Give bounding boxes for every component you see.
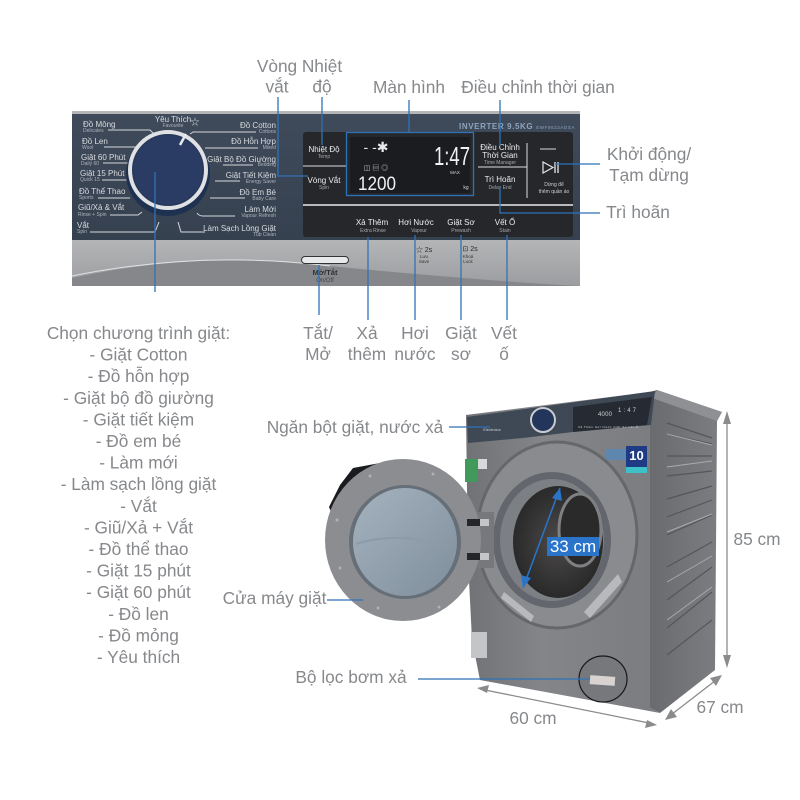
delay end button: Delay End [488, 185, 512, 191]
display and button area [303, 132, 573, 237]
program labels top: ☆ [190, 117, 200, 127]
mini display [573, 397, 652, 432]
program labels right: Tub Clean [253, 232, 276, 238]
drum [513, 486, 603, 598]
program list: - Đồ thể thao [89, 539, 188, 559]
program labels right: Đồ Hỗn Hợp [231, 137, 277, 146]
hold hints [416, 245, 478, 264]
callout: door line [327, 599, 363, 601]
delay end button [485, 175, 515, 191]
label: delay: Trì hoãn [606, 202, 670, 222]
warranty badge: 10 [629, 448, 644, 463]
on off button: On/Off [316, 278, 334, 284]
program labels left: Sports [79, 195, 94, 201]
program labels left: Giũ/Xả & Vắt [78, 203, 125, 212]
lower buttons: Stain [499, 228, 511, 234]
spin button [308, 176, 341, 191]
label: extra rinse: Xả [356, 323, 378, 343]
callout lines top panel [155, 97, 600, 320]
lower buttons: Vapour [411, 228, 427, 234]
side vents [667, 423, 712, 655]
front ring [477, 442, 637, 628]
energy sticker [465, 459, 477, 482]
LCD readout: 1200 [358, 173, 396, 195]
temp button: Temp [318, 154, 330, 160]
filter cover [579, 656, 627, 702]
spin button: Vòng Vắt [308, 176, 341, 185]
warranty badge [606, 446, 647, 473]
program labels right: Energy Saver [246, 179, 276, 185]
LCD readout: 1:47 [434, 141, 470, 171]
lower left label [471, 632, 487, 658]
arrow: drum diameter [521, 488, 562, 588]
callout: filter line [418, 678, 590, 680]
arrow: width [477, 685, 657, 728]
program labels left: Delicates [83, 128, 104, 134]
program labels left: Rinse + Spin [78, 212, 107, 218]
program labels left: Vắt [77, 221, 90, 230]
program list: - Giặt bộ đồ giường [63, 388, 214, 408]
program labels left: Đồ Len [82, 137, 108, 146]
label: vapour: Hơi [401, 323, 429, 343]
program list: - Giặt 15 phút [86, 561, 191, 581]
program labels right: Làm Mới [245, 205, 276, 214]
program labels right: Cottons [259, 129, 276, 135]
program list: - Làm sạch lồng giặt [61, 474, 217, 494]
program labels left: Quick 15 [80, 177, 100, 183]
label: width: 60 cm [509, 708, 557, 728]
hold hints: Lưu [420, 254, 428, 259]
program labels top: Favourite [163, 123, 184, 129]
model badge: INVERTER 9.5KG EWF9523ADSA [459, 122, 575, 131]
label: door: Cửa máy giặt [223, 588, 327, 608]
label: stain: Vết [491, 323, 517, 343]
hold hints: Save [419, 259, 430, 264]
LCD readout [350, 137, 470, 195]
program labels left: Daily 60 [81, 161, 99, 167]
program labels left: Giặt 60 Phút [81, 153, 126, 162]
program list: - Đồ hỗn hợp [88, 366, 189, 386]
label: extra rinse: thêm [348, 344, 386, 364]
hold hints: Lock [463, 259, 473, 264]
program labels left: Đồ Thể Thao [79, 187, 126, 196]
open door [325, 459, 494, 621]
program list: - Đồ len [108, 604, 169, 624]
spin button: Spin [319, 185, 329, 191]
program labels right: Mixed [263, 145, 276, 151]
program list: - Giặt tiết kiệm [83, 409, 194, 429]
label: prewash: Giặt [445, 323, 477, 343]
program labels left: Spin [77, 229, 87, 235]
arrow: depth [665, 675, 722, 720]
program labels right: Vapour Refresh [241, 213, 276, 219]
arrow: height [723, 411, 731, 668]
program labels right: Làm Sạch Lồng Giặt [203, 224, 277, 233]
label: screen: Màn hình [373, 77, 445, 97]
program labels right: Đồ Cotton [240, 121, 276, 130]
lower buttons: Xả Thêm [356, 218, 388, 227]
program labels right: Bedding [258, 162, 276, 168]
lower buttons: Extra Rinse [360, 228, 386, 234]
lower buttons: Prewash [451, 228, 471, 234]
LCD readout: MAX [450, 170, 460, 175]
on off button [302, 256, 348, 284]
lower buttons: Hơi Nước [398, 218, 434, 227]
program labels top: Yêu Thích [155, 115, 191, 124]
label: depth: 67 cm [696, 697, 744, 717]
program list: - Yêu thích [97, 647, 180, 667]
start pause button: thêm quần áo [539, 189, 570, 195]
LCD readout: kg [463, 185, 469, 191]
program labels left: Giặt 15 Phút [80, 169, 125, 178]
program labels right: Baby Care [252, 196, 276, 202]
program dial [126, 132, 210, 216]
label: start pause: Khởi động/ [607, 144, 691, 164]
time manager button: Điều Chỉnh [480, 143, 520, 152]
program list: - Vắt [120, 496, 157, 516]
temp button [308, 145, 340, 160]
warning stickers [501, 592, 534, 622]
lower buttons: Giặt Sơ [447, 218, 475, 227]
label: vapour: nước [394, 344, 436, 364]
lower buttons [356, 217, 515, 234]
gasket [493, 472, 611, 608]
hold hints: ☆ 2s [416, 245, 433, 254]
hold hints: Khoá [463, 254, 474, 259]
lower buttons: Vết Ố [495, 217, 515, 227]
mini display text: 1:47 [618, 408, 637, 414]
label: time manager: Điều chỉnh thời gian [461, 77, 615, 97]
program list: - Giặt Cotton [90, 345, 187, 365]
program labels right: Giặt Bộ Đồ Giường [207, 155, 276, 164]
delay end button: Trì Hoãn [485, 175, 515, 184]
label: drum diameter: 33 cm [550, 537, 596, 556]
temp button: Nhiệt Độ [308, 145, 340, 154]
label: stain: ố [499, 344, 509, 364]
logo: Electrolux [483, 427, 501, 432]
label: detergent drawer: Ngăn bột giặt, nước xả [267, 417, 444, 437]
label: temperature: độ [312, 76, 332, 96]
program labels top [155, 115, 200, 129]
callout: detergent drawer line [449, 426, 490, 428]
time manager button: Time Manager [484, 160, 516, 166]
LCD readout: ◫ ▤ ◎ [364, 164, 388, 172]
time manager button [480, 143, 520, 166]
program labels left: Wool [82, 145, 93, 151]
mini display text: Xả Thêm Hơi Nước Giặt Sơ Vết Ố [578, 424, 639, 429]
front face [466, 392, 660, 713]
on off button: Mở/Tắt [313, 268, 338, 277]
program labels right: Đồ Em Bé [240, 188, 277, 197]
program list: - Giặt 60 phút [86, 582, 191, 602]
program list: Chọn chương trình giặt: [47, 323, 230, 343]
start pause button [539, 149, 570, 195]
side face [650, 390, 722, 713]
time manager button: Thời Gian [482, 151, 518, 160]
label: on off: Mở [305, 344, 331, 364]
LCD readout: - -✱ [364, 139, 388, 155]
mini display text [578, 408, 639, 429]
mini dial [531, 408, 555, 432]
program list: - Làm mới [99, 453, 178, 473]
washing machine [465, 390, 722, 713]
program list: - Đồ mỏng [98, 625, 179, 645]
program list: - Đồ em bé [96, 431, 181, 451]
start pause button: Dừng để [544, 181, 564, 188]
program labels right: Giặt Tiết Kiệm [226, 171, 276, 180]
label: spin: Vòng [257, 56, 297, 76]
control panel close-up [47, 56, 781, 728]
label: pump filter: Bộ lọc bơm xả [295, 667, 407, 687]
program labels left [77, 120, 159, 235]
label: start pause: Tạm dừng [609, 165, 689, 185]
label: spin: vắt [265, 76, 289, 96]
top control strip [467, 391, 655, 443]
program labels left: Đồ Mông [83, 120, 115, 129]
program list: - Giũ/Xả + Vắt [84, 517, 193, 537]
label: prewash: sơ [451, 344, 471, 364]
mini display text: 4000 [598, 412, 613, 418]
program labels right [178, 121, 277, 238]
label: on off: Tắt/ [303, 323, 333, 343]
hold hints: ⊡ 2s [462, 246, 478, 253]
label: temperature: Nhiệt [302, 56, 342, 76]
label: height: 85 cm [733, 529, 781, 549]
